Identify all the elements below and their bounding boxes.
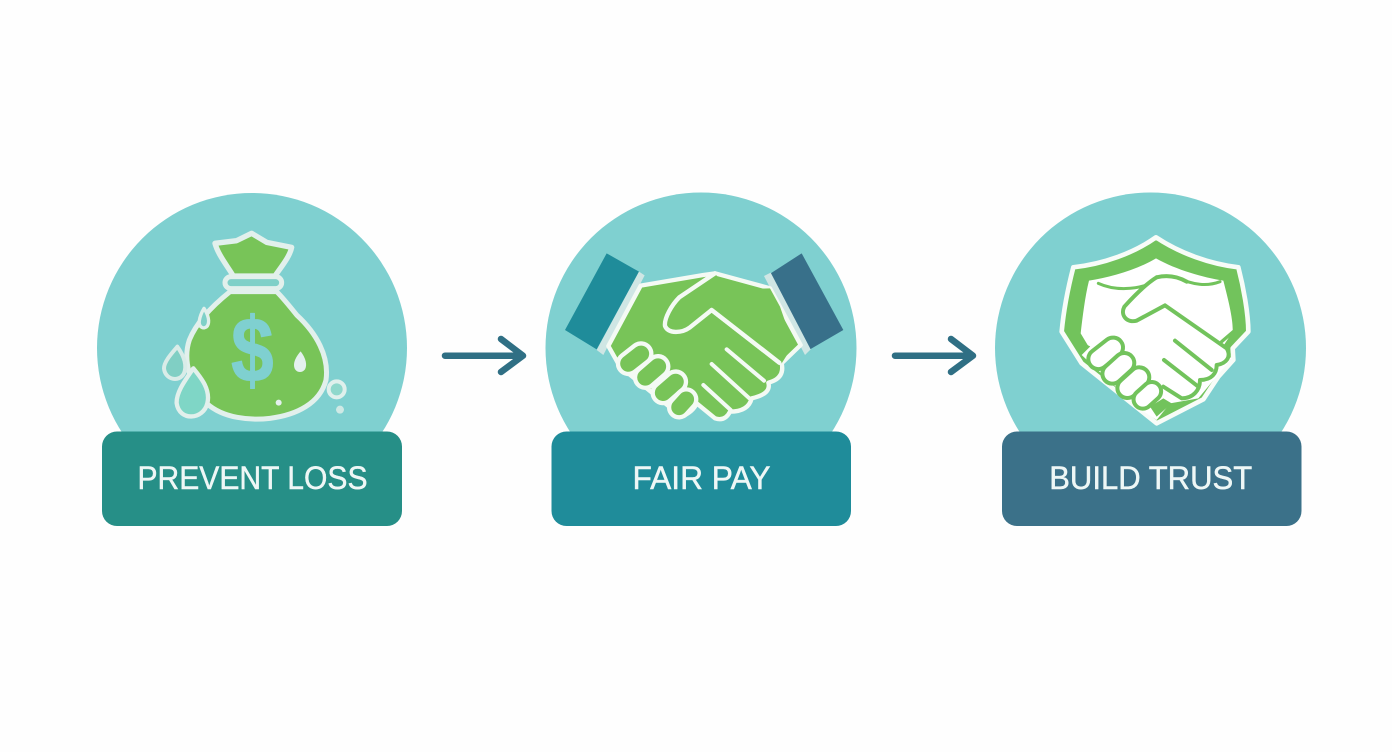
arrow: prevent loss to fair pay: [445, 339, 523, 372]
label box: prevent loss: PREVENT LOSS: [138, 460, 368, 496]
background circle: prevent loss: [97, 193, 407, 503]
panel: fair pay: [546, 192, 856, 526]
icon: money bag with drops: $: [231, 300, 274, 402]
label box: build trust: [1002, 432, 1302, 526]
icon: money bag with drops: [164, 233, 345, 419]
arrow: fair pay to build trust: [895, 339, 973, 372]
icon: shield with handshake: [1062, 237, 1248, 423]
background circle: build trust: [995, 192, 1306, 504]
background circle: fair pay: [546, 192, 856, 504]
label box: build trust: BUILD TRUST: [1049, 460, 1252, 496]
icon: handshake: [565, 253, 843, 421]
label box: fair pay: [552, 432, 851, 526]
label box: prevent loss: [102, 432, 402, 526]
panel: build trust: [995, 192, 1306, 526]
label box: fair pay: FAIR PAY: [632, 460, 770, 496]
panel: prevent loss: [97, 193, 407, 526]
